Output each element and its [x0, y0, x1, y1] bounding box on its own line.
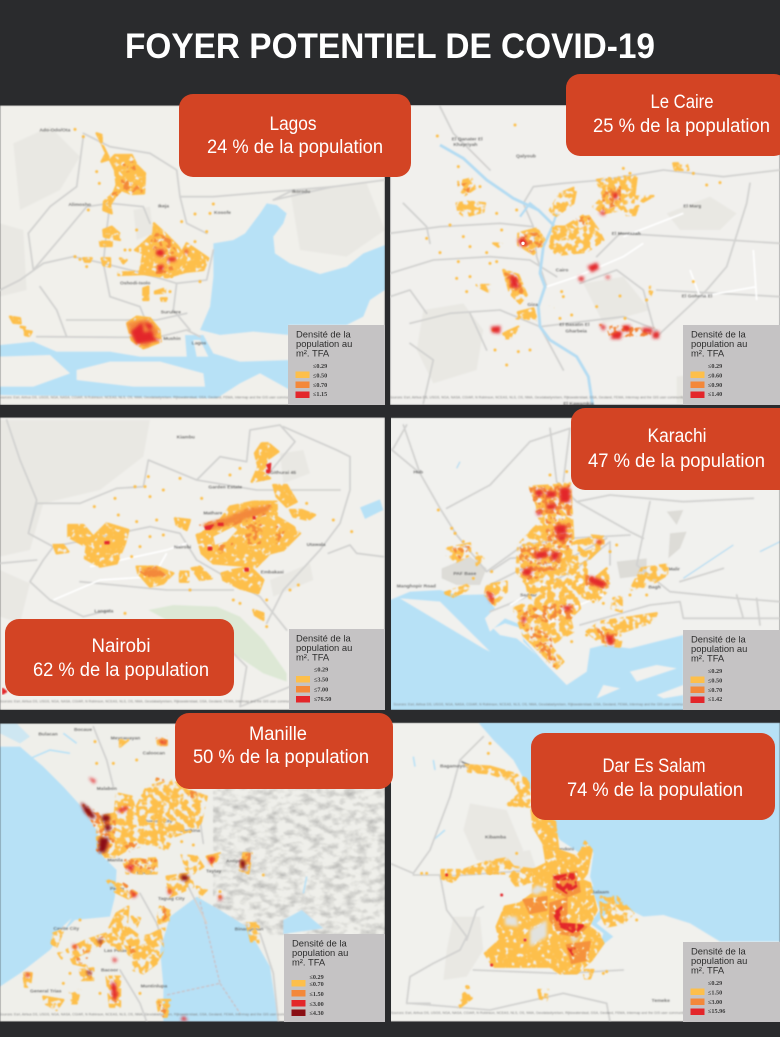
- Le Caire base map: El Marg: [683, 203, 701, 209]
- Le Caire base map: El Qanater El: [452, 137, 483, 143]
- Manille base map: Muntinlupa: [141, 983, 167, 989]
- Manille base map: Quezon City: [143, 819, 173, 825]
- Nairobi base map: Langata: [94, 609, 114, 615]
- panel: Lagos map: population au: [296, 338, 352, 349]
- Nairobi base map: Embakasi: [261, 569, 285, 575]
- Le Caire density patches: [427, 125, 720, 365]
- Le Caire base map: [389, 105, 780, 407]
- Manille base map: Antipolo: [226, 859, 246, 865]
- Manille legend: ≤0.29: [310, 974, 324, 981]
- Karachi legend: ≤1.42: [708, 696, 722, 703]
- Dar Es Salam density patches: [422, 743, 637, 1008]
- callout: Nairobi: Nairobi: [92, 636, 150, 657]
- Manille legend: population au: [292, 947, 348, 958]
- Le Caire legend: m². TFA: [691, 348, 725, 358]
- Karachi legend: population au: [691, 643, 747, 654]
- Lagos base map: Ado-Odo/Ota: [39, 127, 71, 133]
- Manille base map: Meycauayan: [111, 735, 140, 741]
- Dar Es Salam base map: Bagamoyo: [440, 763, 465, 769]
- Manille base map: Bocaue: [74, 727, 92, 733]
- Karachi base map: PAF Base: [453, 571, 476, 577]
- Manille legend: m². TFA: [292, 956, 326, 968]
- Nairobi base map: Mathare: [203, 510, 223, 516]
- Dar Es Salam legend: [683, 942, 780, 1022]
- Le Caire base map: Khayriyah: [453, 142, 477, 148]
- Lagos base map: Oshodi-Isolo: [120, 280, 150, 286]
- Manille base map: Pasay: [110, 886, 125, 892]
- Lagos base map: Alimosho: [68, 202, 91, 208]
- Karachi base map: Bagh: [648, 584, 661, 590]
- Le Caire legend: population au: [691, 338, 747, 349]
- Nairobi legend: Densité de la: [296, 632, 352, 644]
- Dar Es Salam legend: ≤0.29: [708, 980, 722, 987]
- Dar Es Salam legend: ≤3.00: [708, 999, 722, 1006]
- Le Caire legend: Densité de la: [691, 328, 747, 340]
- Nairobi legend: ≤7.00: [314, 686, 328, 694]
- callout: Karachi: Karachi: [648, 426, 706, 447]
- panel: Lagos map: ≤0.50: [313, 372, 327, 380]
- Manille legend: ≤1.50: [310, 991, 324, 998]
- Karachi legend: ≤0.70: [708, 687, 722, 694]
- Karachi base map: Manghopir Road: [397, 584, 436, 590]
- Manille legend: [284, 934, 385, 1022]
- Le Caire base map: Sources: Esri, Airbus DS, USGS, NGA, NASA, CGIAR, N Robinson, NCEAS, NLS, OS, NMA, Geodatastyrelsen, Rijkswaterstaat, GSA, Geoland, FEMA, Intermap and the GIS user community: [389, 395, 685, 399]
- Manille legend: ≤4.30: [310, 1010, 324, 1017]
- callout: Karachi: [571, 408, 780, 490]
- Le Caire legend: ≤0.60: [708, 372, 722, 380]
- panel: Nairobi map: [0, 417, 385, 710]
- title: FOYER POTENTIEL DE COVID-19: [125, 26, 655, 66]
- Manille base map: Caloocan: [143, 750, 165, 756]
- panel: Lagos map: ≤0.70: [313, 382, 327, 389]
- Manille base map: Makati: [137, 870, 153, 876]
- Nairobi legend: population au: [296, 642, 352, 653]
- Lagos base map: Surulere: [161, 309, 181, 315]
- Manille base map: Taytay: [206, 869, 222, 875]
- panel: Lagos map: m². TFA: [296, 348, 330, 358]
- Manille base map: [0, 723, 385, 1022]
- Lagos base map: Ikeja: [158, 203, 169, 209]
- Le Caire legend: [683, 325, 780, 405]
- Manille legend: ≤3.00: [310, 1001, 324, 1008]
- callout: Karachi: 47 % de la population: [588, 451, 765, 472]
- Nairobi base map: Sources: Esri, Airbus DS, USGS, NGA, NASA, CGIAR, N Robinson, NCEAS, NLS, OS, NMA, Geodatastyrelsen, Rijkswaterstaat, GSA, Geoland, FEMA, Intermap and the GIS user community: [0, 700, 295, 704]
- Dar Es Salam legend: population au: [691, 955, 747, 966]
- Manille base map: General Trias: [30, 989, 62, 995]
- Karachi base map: Sources: Esri, Airbus DS, USGS, NGA, NASA, CGIAR, N Robinson, NCEAS, NLS, OS, NMA, Geodatastyrelsen, Rijkswaterstaat, GSA, Geoland, FEMA, Intermap and the GIS user community: [393, 703, 689, 707]
- Nairobi legend: ≤3.50: [314, 676, 328, 684]
- callout: Lagos: [179, 94, 411, 177]
- Karachi base map: Malir: [668, 567, 680, 573]
- Karachi legend: [683, 630, 780, 710]
- Lagos density patches: [10, 129, 213, 348]
- callout: Dar Es Salam: Dar Es Salam: [602, 756, 706, 777]
- Manille base map: Bulacan: [38, 731, 58, 737]
- callout: Lagos: 24 % de la population: [207, 137, 383, 158]
- Lagos base map: Kosofe: [214, 210, 231, 216]
- callout: Dar Es Salam: 74 % de la population: [567, 780, 743, 801]
- Le Caire base map: Qalyoub: [516, 154, 536, 160]
- panel: Manille map: [0, 723, 385, 1022]
- Manille base map: Malabon: [97, 786, 117, 792]
- callout: Manille: Manille: [249, 724, 307, 745]
- Dar Es Salam base map: Sources: Esri, Airbus DS, USGS, NGA, NASA, CGIAR, N Robinson, NCEAS, NLS, OS, NMA, Geodatastyrelsen, Rijkswaterstaat, GSA, Geoland, FEMA, Intermap and the GIS user community: [391, 1011, 686, 1015]
- Manille base map: Las Piñas: [104, 948, 127, 954]
- Manille base map: Binangonan: [235, 927, 263, 933]
- Le Caire legend: ≤0.29: [708, 363, 722, 370]
- panel: Lagos map: Densité de la: [296, 328, 352, 340]
- Le Caire base map: El Montazah: [612, 231, 641, 237]
- Manille base map: Manila: [107, 857, 123, 863]
- Lagos base map: Ikorodu: [292, 189, 310, 195]
- Dar Es Salam base map: [390, 723, 780, 1022]
- Dar Es Salam base map: Salaam: [592, 889, 610, 895]
- Nairobi base map: Githurai 45: [270, 470, 296, 476]
- Nairobi base map: Nairobi: [174, 544, 192, 550]
- Karachi legend: ≤0.29: [708, 668, 722, 675]
- panel: Le Caire map: [389, 105, 780, 407]
- Le Caire base map: El Basatin El: [559, 322, 590, 328]
- callout: Manille: 50 % de la population: [193, 747, 369, 768]
- panel: Lagos map: [0, 105, 385, 405]
- Le Caire base map: El Gohena El: [682, 293, 713, 299]
- Nairobi density patches: [3, 443, 352, 694]
- Dar Es Salam base map: Temeke: [652, 998, 670, 1004]
- Nairobi base map: Kiambu: [177, 434, 195, 440]
- Dar Es Salam legend: Densité de la: [691, 946, 747, 956]
- callout: Dar Es Salam: [531, 733, 775, 820]
- panel: Lagos map: ≤0.29: [313, 363, 327, 370]
- Manille base map: Taguig City: [158, 896, 185, 902]
- Lagos base map: Mushin: [163, 336, 181, 342]
- callout: Le Caire: Le Caire: [650, 92, 714, 113]
- callout: Nairobi: [5, 619, 234, 696]
- Karachi legend: m². TFA: [691, 652, 725, 664]
- Karachi base map: Hub: [413, 470, 423, 476]
- Manille base map: Marikina: [180, 828, 200, 834]
- Karachi legend: Densité de la: [691, 634, 747, 644]
- Karachi base map: Saddar: [520, 593, 537, 599]
- Karachi base map: [390, 418, 780, 710]
- callout: Nairobi: 62 % de la population: [33, 660, 209, 681]
- Manille base map: Bacoor: [101, 967, 118, 973]
- Manille legend: Densité de la: [292, 938, 348, 948]
- Karachi density patches: [438, 472, 668, 668]
- Manille density patches: [23, 737, 263, 1020]
- panel: Karachi map: [390, 418, 780, 710]
- Dar Es Salam legend: ≤15.96: [708, 1008, 725, 1015]
- Manille legend: ≤0.70: [310, 981, 324, 988]
- callout: Le Caire: 25 % de la population: [593, 116, 770, 137]
- panel: Lagos map: ≤1.15: [313, 391, 327, 398]
- Manille base map: Sources: Esri, Airbus DS, USGS, NGA, NASA, CGIAR, N Robinson, NCEAS, NLS, OS, NMA, Geodatastyrelsen, Rijkswaterstaat, GSA, Geoland, FEMA, Intermap and the GIS user community: [0, 1012, 295, 1016]
- Nairobi base map: Utawala: [307, 542, 326, 548]
- Dar Es Salam base map: Kinondoni: [549, 847, 575, 853]
- Nairobi base map: [0, 417, 385, 710]
- callout: Lagos: Lagos: [270, 114, 316, 135]
- panel: Dar Es Salam map: [390, 723, 780, 1022]
- Nairobi legend: m². TFA: [296, 652, 330, 662]
- Nairobi legend: [289, 629, 385, 710]
- Lagos base map: Lagos: [192, 340, 207, 346]
- Nairobi base map: Garden Estate: [208, 484, 242, 490]
- Karachi legend: ≤0.50: [708, 678, 722, 684]
- Nairobi legend: ≤76.50: [314, 696, 331, 703]
- Lagos base map: [0, 105, 385, 405]
- Le Caire base map: Giza: [527, 302, 538, 308]
- Lagos base map: Sources: Esri, Airbus DS, USGS, NGA, NASA, CGIAR, N Robinson, NCEAS, NLS, OS, NMA, Geodatastyrelsen, Rijkswaterstaat, GSA, Geoland, FEMA, Intermap and the GIS user community: [0, 395, 294, 399]
- Dar Es Salam legend: ≤1.50: [708, 990, 722, 996]
- Dar Es Salam base map: Kibamba: [485, 835, 506, 841]
- Nairobi legend: ≤0.29: [314, 666, 328, 674]
- callout: Manille: [175, 713, 393, 789]
- Manille base map: Cavite City: [53, 926, 79, 932]
- Le Caire base map: El Kawamkia: [563, 401, 594, 407]
- Le Caire base map: Cairo: [556, 268, 568, 274]
- Le Caire legend: ≤1.40: [708, 391, 722, 398]
- Dar Es Salam legend: m². TFA: [691, 964, 725, 976]
- Le Caire base map: Gharbeia: [565, 329, 587, 335]
- Le Caire legend: ≤0.90: [708, 382, 722, 389]
- callout: Le Caire: [566, 74, 780, 156]
